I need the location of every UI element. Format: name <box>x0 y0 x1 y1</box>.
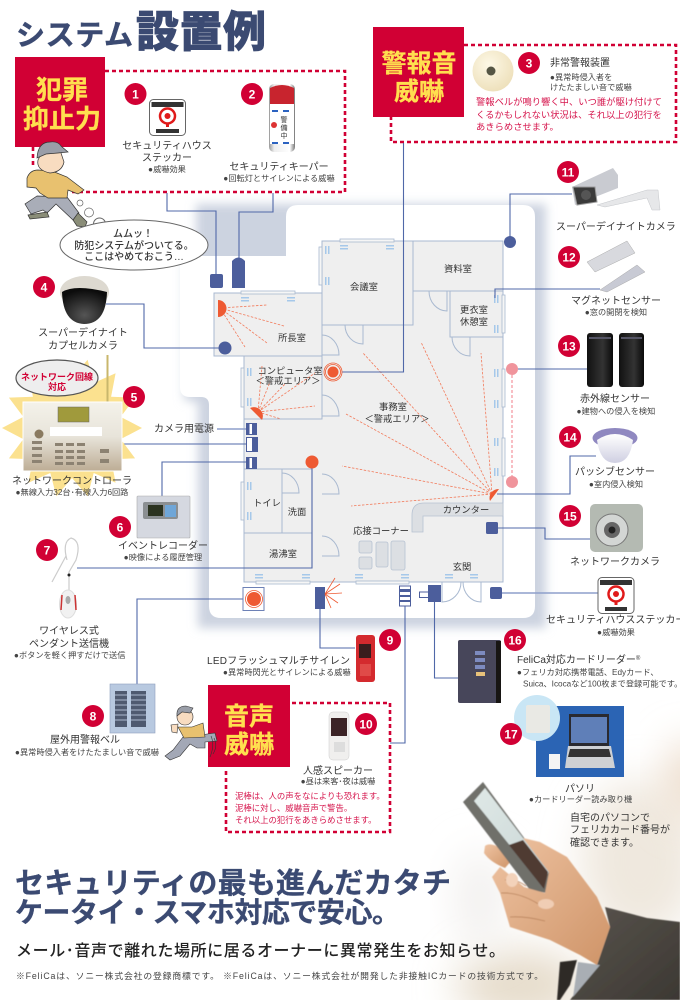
item 5: network controller <box>2 355 145 497</box>
room: kitchenette: 湯沸室 <box>269 548 297 559</box>
heading: alarm sound threat: 警報音 <box>381 50 457 78</box>
speech bubble: ここはやめておこう… <box>84 251 184 263</box>
device: camera power units <box>246 423 258 469</box>
item 2: security keeper: 備 <box>280 123 288 132</box>
speech bubble: 防犯システムがついてる。 <box>74 239 194 252</box>
item 2: security keeper: 2 <box>249 88 256 102</box>
item 2: security keeper: 中 <box>280 131 288 140</box>
item 5: network controller: ●無線入力32台･有線入力6回路 <box>16 487 128 497</box>
item 3: emergency alarm device: 非常警報装置 <box>550 56 610 69</box>
headline <box>15 867 451 928</box>
heading: voice threat: 威嚇 <box>224 731 274 759</box>
room labels: office, reception, entrance: 玄関 <box>453 561 471 572</box>
heading: alarm sound threat <box>373 27 464 117</box>
item 12: magnet sensor <box>558 241 661 317</box>
item 10: human sensor speaker: ●昼は来客･夜は威嚇 <box>301 776 375 786</box>
item 9: LED flash siren: 9 <box>387 634 394 648</box>
item 10: human sensor speaker: 泥棒は、人の声をなによりも恐れます。 <box>235 791 385 801</box>
item 2: security keeper <box>223 83 335 183</box>
reception furniture <box>359 541 405 570</box>
item 1: security house sticker: ●威嚇効果 <box>148 164 186 174</box>
item 10: human sensor speaker: 人感スピーカー <box>303 764 373 777</box>
item 3: emergency alarm device: あきらめさせます。 <box>476 122 559 132</box>
item 17: PaSoRi reader and laptop photo: 17 <box>504 728 518 742</box>
headline: セキュリティの最も進んだカタチ <box>15 867 451 900</box>
item 10: human sensor speaker: 10 <box>359 718 373 732</box>
room: archive <box>413 241 503 291</box>
item 1: security house sticker <box>122 83 212 174</box>
room: toilet and wash: トイレ <box>253 498 281 508</box>
item 7: wireless pendant: 7 <box>44 544 51 558</box>
item 16: FeliCa card reader: ●フェリカ対応携帯電話、Edyカード、 <box>517 667 659 677</box>
room: computer: ＜警戒エリア＞ <box>255 375 321 386</box>
item 12: magnet sensor: 12 <box>562 250 576 264</box>
callout: network line support: 対応 <box>48 381 66 392</box>
item 14: passive sensor <box>559 426 655 489</box>
device: siren point <box>315 578 342 609</box>
item 4: dome camera: 4 <box>41 280 48 294</box>
heading: crime deterrence <box>15 57 105 147</box>
callout: network line support: ネットワーク回線 <box>21 371 93 382</box>
footnote: ※FeliCaは、ソニー株式会社の登録商標です。 ※FeliCaは、ソニー株式会社が開発した非接触ICカードの技術方式です。 <box>16 970 543 981</box>
floor devices <box>210 236 518 610</box>
item 7: wireless pendant: ●ボタンを軽く押すだけで送信 <box>14 650 125 660</box>
counter <box>412 503 503 532</box>
item 7: wireless pendant: ワイヤレス式 <box>39 624 99 637</box>
item 8: outdoor alarm bell: 屋外用警報ベル <box>50 733 120 746</box>
item 1: security house sticker: ステッカー <box>142 152 192 164</box>
wiring lines <box>77 143 600 743</box>
doors <box>282 291 481 602</box>
item 11: super day night camera: スーパーデイナイトカメラ <box>556 220 676 233</box>
item 13: infrared sensor: 13 <box>562 340 576 354</box>
device: alarm point <box>324 363 342 381</box>
device: card reader point <box>420 585 441 602</box>
item: security house sticker right: ●威嚇効果 <box>597 627 635 637</box>
item 17: PaSoRi reader and laptop photo: パソリ <box>565 783 595 795</box>
room: toilet and wash: 洗面 <box>288 506 306 517</box>
item 16: FeliCa card reader: Suica、Icocaなど100枚まで登録可能です。 <box>523 678 680 688</box>
device: outdoor bell point <box>243 588 264 610</box>
item 3: emergency alarm device: くるかもしれない状況は、それ以上の犯行を <box>476 109 662 120</box>
room: conference: 会議室 <box>350 281 378 292</box>
room: archive: 資料室 <box>444 263 472 274</box>
photo: hand holding phone <box>463 782 680 1000</box>
headline: ケータイ・スマホ対応で安心。 <box>15 897 400 928</box>
speech bubble <box>60 218 208 270</box>
heading: voice threat <box>208 685 290 767</box>
item 14: passive sensor: パッシブセンサー <box>575 465 655 478</box>
title: システム <box>16 20 133 52</box>
item 3: emergency alarm device: 3 <box>526 56 533 70</box>
item 17: PaSoRi reader and laptop photo: ●カードリーダー読み取り機 <box>529 794 632 804</box>
photo caption: PC confirmation note: フェリカカード番号が <box>570 823 670 836</box>
item: security house sticker right <box>546 578 680 637</box>
device: orange node <box>306 456 318 468</box>
room: computer: コンピュータ室 <box>257 365 323 376</box>
item 5: network controller: 5 <box>131 390 138 404</box>
item 9: LED flash siren: ●異常時閃光とサイレンによる威嚇 <box>223 667 351 677</box>
item 12: magnet sensor: ●窓の開閉を検知 <box>585 307 647 317</box>
running burglar character <box>165 706 217 760</box>
counter: カウンター <box>443 505 489 515</box>
heading: crime deterrence: 犯罪 <box>36 75 88 105</box>
item 16: FeliCa card reader: 16 <box>508 634 522 648</box>
item 2: security keeper: ●回転灯とサイレンによる威嚇 <box>223 173 335 183</box>
label: camera power: カメラ用電源 <box>154 422 214 435</box>
heading: crime deterrence: 抑止力 <box>23 104 101 134</box>
windows <box>241 239 505 584</box>
room: conference <box>322 241 413 325</box>
title <box>16 9 266 57</box>
item 6: event recorder <box>109 496 208 562</box>
device: sticker node and keeper node <box>210 258 245 288</box>
room: director: 所長室 <box>278 332 306 343</box>
item 10: human sensor speaker: 泥棒に対し、威嚇音声で警告。 <box>235 803 352 813</box>
subheading: メール･音声で離れた場所に居るオーナーに異常発生をお知らせ。 <box>16 942 505 960</box>
motion sensor: computer room <box>250 366 315 420</box>
item 7: wireless pendant <box>14 538 125 660</box>
item 3: emergency alarm device: ●異常時侵入者を <box>550 72 612 82</box>
device: blue nodes <box>218 236 516 599</box>
item 1: security house sticker: 1 <box>132 88 139 102</box>
room: director <box>214 293 322 356</box>
item 13: infrared sensor <box>558 333 655 416</box>
item 10: human sensor speaker: それ以上の犯行をあきらめさせます。 <box>235 815 377 825</box>
item 6: event recorder: ●映像による履歴管理 <box>124 552 202 562</box>
item 6: event recorder: 6 <box>117 520 124 534</box>
motion sensor: director room <box>218 300 284 347</box>
callout: network line support <box>16 360 98 396</box>
motion sensor: office <box>342 342 499 506</box>
photo caption: PC confirmation note: 確認できます。 <box>570 836 639 849</box>
panel: alarm threat dashed frame <box>391 45 676 142</box>
photo background: blurred office behind hand <box>455 740 680 1000</box>
device: infrared beam <box>506 363 518 488</box>
room labels: office, reception, entrance <box>353 401 471 572</box>
panel: crime deterrence dashed frame <box>33 71 345 192</box>
panel: voice threat dashed frame <box>226 703 390 832</box>
item 2: security keeper: セキュリティキーパー <box>229 161 329 173</box>
photo caption: PC confirmation note <box>570 811 670 849</box>
title: 設置例 <box>136 9 266 57</box>
item 9: LED flash siren <box>207 629 401 682</box>
item 15: network camera: 15 <box>563 510 577 524</box>
item 12: magnet sensor: マグネットセンサー <box>571 294 661 307</box>
item 15: network camera <box>559 504 660 568</box>
item 14: passive sensor: 14 <box>563 430 577 444</box>
item 3: emergency alarm device <box>472 50 662 132</box>
item 16: FeliCa card reader: FeliCa対応カードリーダー <box>517 655 636 666</box>
room: kitchenette <box>244 533 312 568</box>
room labels: office, reception, entrance: ＜警戒エリア＞ <box>364 413 430 424</box>
item 2: security keeper: 警 <box>280 115 288 124</box>
item 8: outdoor alarm bell: 8 <box>90 710 97 724</box>
room: toilet and wash <box>244 469 312 533</box>
item 15: network camera: ネットワークカメラ <box>570 556 660 568</box>
heading: voice threat: 音声 <box>224 703 274 731</box>
item 10: human sensor speaker <box>235 712 385 825</box>
item 4: dome camera: スーパーデイナイト <box>38 326 128 339</box>
photo caption: PC confirmation note: 自宅のパソコンで <box>570 811 650 824</box>
floor plan backdrop with shadow <box>180 204 546 628</box>
item 13: infrared sensor: ●建物への侵入を検知 <box>577 406 655 416</box>
item 8: outdoor alarm bell: ●異常時侵入者をけたたましい音で威嚇 <box>15 747 159 757</box>
item 8: outdoor alarm bell <box>15 684 159 757</box>
floor plan <box>214 239 505 602</box>
room: computer <box>244 356 323 419</box>
room labels: office, reception, entrance: 応接コーナー <box>353 525 409 536</box>
item 16: FeliCa card reader: ® <box>636 655 641 662</box>
item 4: dome camera: カプセルカメラ <box>48 340 118 352</box>
room: changing room: 更衣室 <box>460 304 488 315</box>
item 11: super day night camera <box>556 161 676 233</box>
window sensors <box>241 245 498 578</box>
burglar character: sneaking man <box>25 142 94 227</box>
item 3: emergency alarm device: 警報ベルが鳴り響く中、いつ誰が駆け付けて <box>476 96 662 107</box>
device: speaker point <box>400 586 410 606</box>
speech bubble: ムムッ！ <box>113 228 153 240</box>
item 13: infrared sensor: 赤外線センサー <box>580 392 650 405</box>
item 9: LED flash siren: LEDフラッシュマルチサイレン <box>207 655 350 667</box>
item 1: security house sticker: セキュリティハウス <box>122 140 212 152</box>
room: changing room: 休憩室 <box>460 316 488 327</box>
heading: alarm sound threat: 威嚇 <box>394 78 444 106</box>
room: changing room <box>450 291 503 337</box>
item 5: network controller: ネットワークコントローラ <box>12 475 132 487</box>
item 6: event recorder: イベントレコーダー <box>118 539 208 552</box>
item 17: PaSoRi reader and laptop photo <box>500 695 632 804</box>
item 16: FeliCa card reader <box>458 629 680 703</box>
floor: main <box>244 241 503 582</box>
item 3: emergency alarm device: けたたましい音で威嚇 <box>550 82 632 92</box>
item 14: passive sensor: ●室内侵入検知 <box>589 479 643 489</box>
item 11: super day night camera: 11 <box>562 166 575 180</box>
item 4: dome camera <box>33 276 128 352</box>
item 7: wireless pendant: ペンダント送信機 <box>29 637 109 650</box>
room labels: office, reception, entrance: 事務室 <box>379 401 407 412</box>
